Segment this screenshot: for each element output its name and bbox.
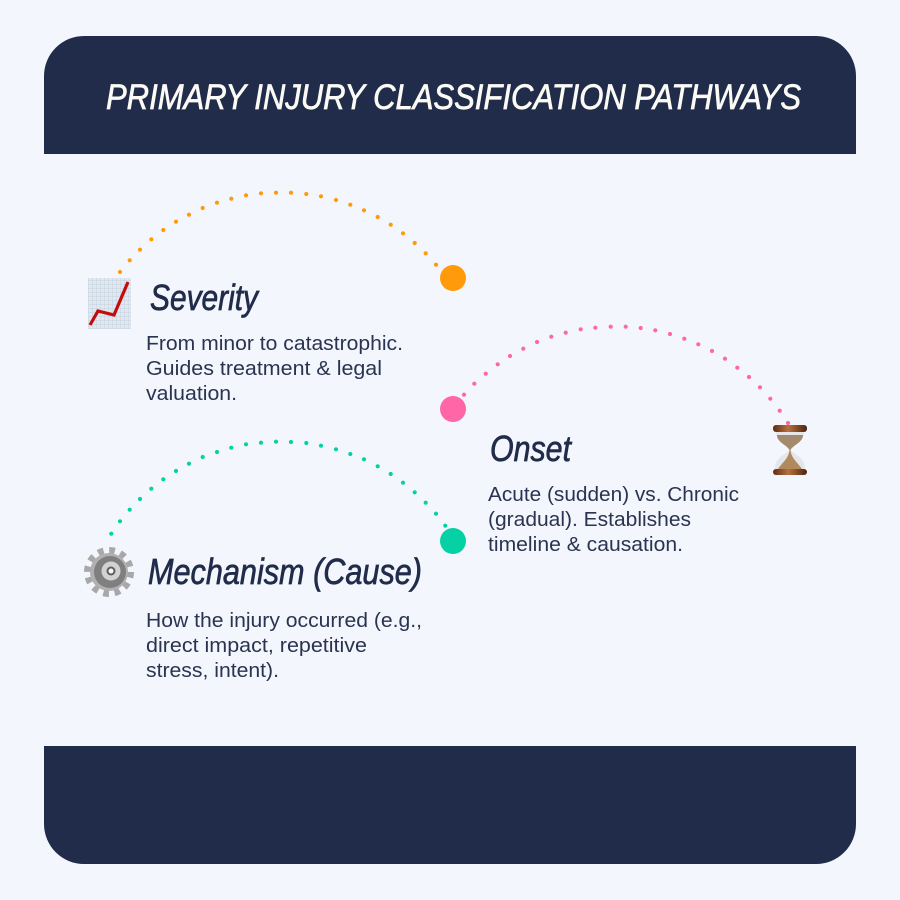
footer banner	[44, 746, 856, 864]
arc: severity	[118, 191, 438, 274]
marker: onset	[440, 396, 466, 422]
icon: gear	[88, 551, 130, 593]
heading: severity: Severity	[150, 277, 260, 318]
text: mechanism: direct impact, repetitive	[146, 635, 367, 657]
text: onset: Acute (sudden) vs. Chronic	[488, 484, 739, 506]
heading: mechanism: Mechanism (Cause)	[148, 551, 422, 592]
text: onset: (gradual). Establishes	[488, 509, 691, 531]
marker: mechanism	[440, 528, 466, 554]
text: mechanism: How the injury occurred (e.g.,	[146, 610, 422, 632]
title: PRIMARY INJURY CLASSIFICATION PATHWAYS	[106, 78, 801, 117]
text: mechanism: stress, intent).	[146, 660, 279, 682]
arc: onset	[462, 325, 790, 425]
icon: hourglass	[773, 425, 807, 475]
marker: severity	[440, 265, 466, 291]
arc: mechanism	[109, 440, 447, 536]
header banner	[44, 36, 856, 154]
text: severity: valuation.	[146, 383, 237, 405]
heading: onset: Onset	[490, 428, 573, 469]
text: severity: Guides treatment & legal	[146, 358, 382, 380]
text: severity: From minor to catastrophic.	[146, 333, 403, 355]
text: onset: timeline & causation.	[488, 534, 683, 556]
icon: chart	[88, 278, 131, 329]
